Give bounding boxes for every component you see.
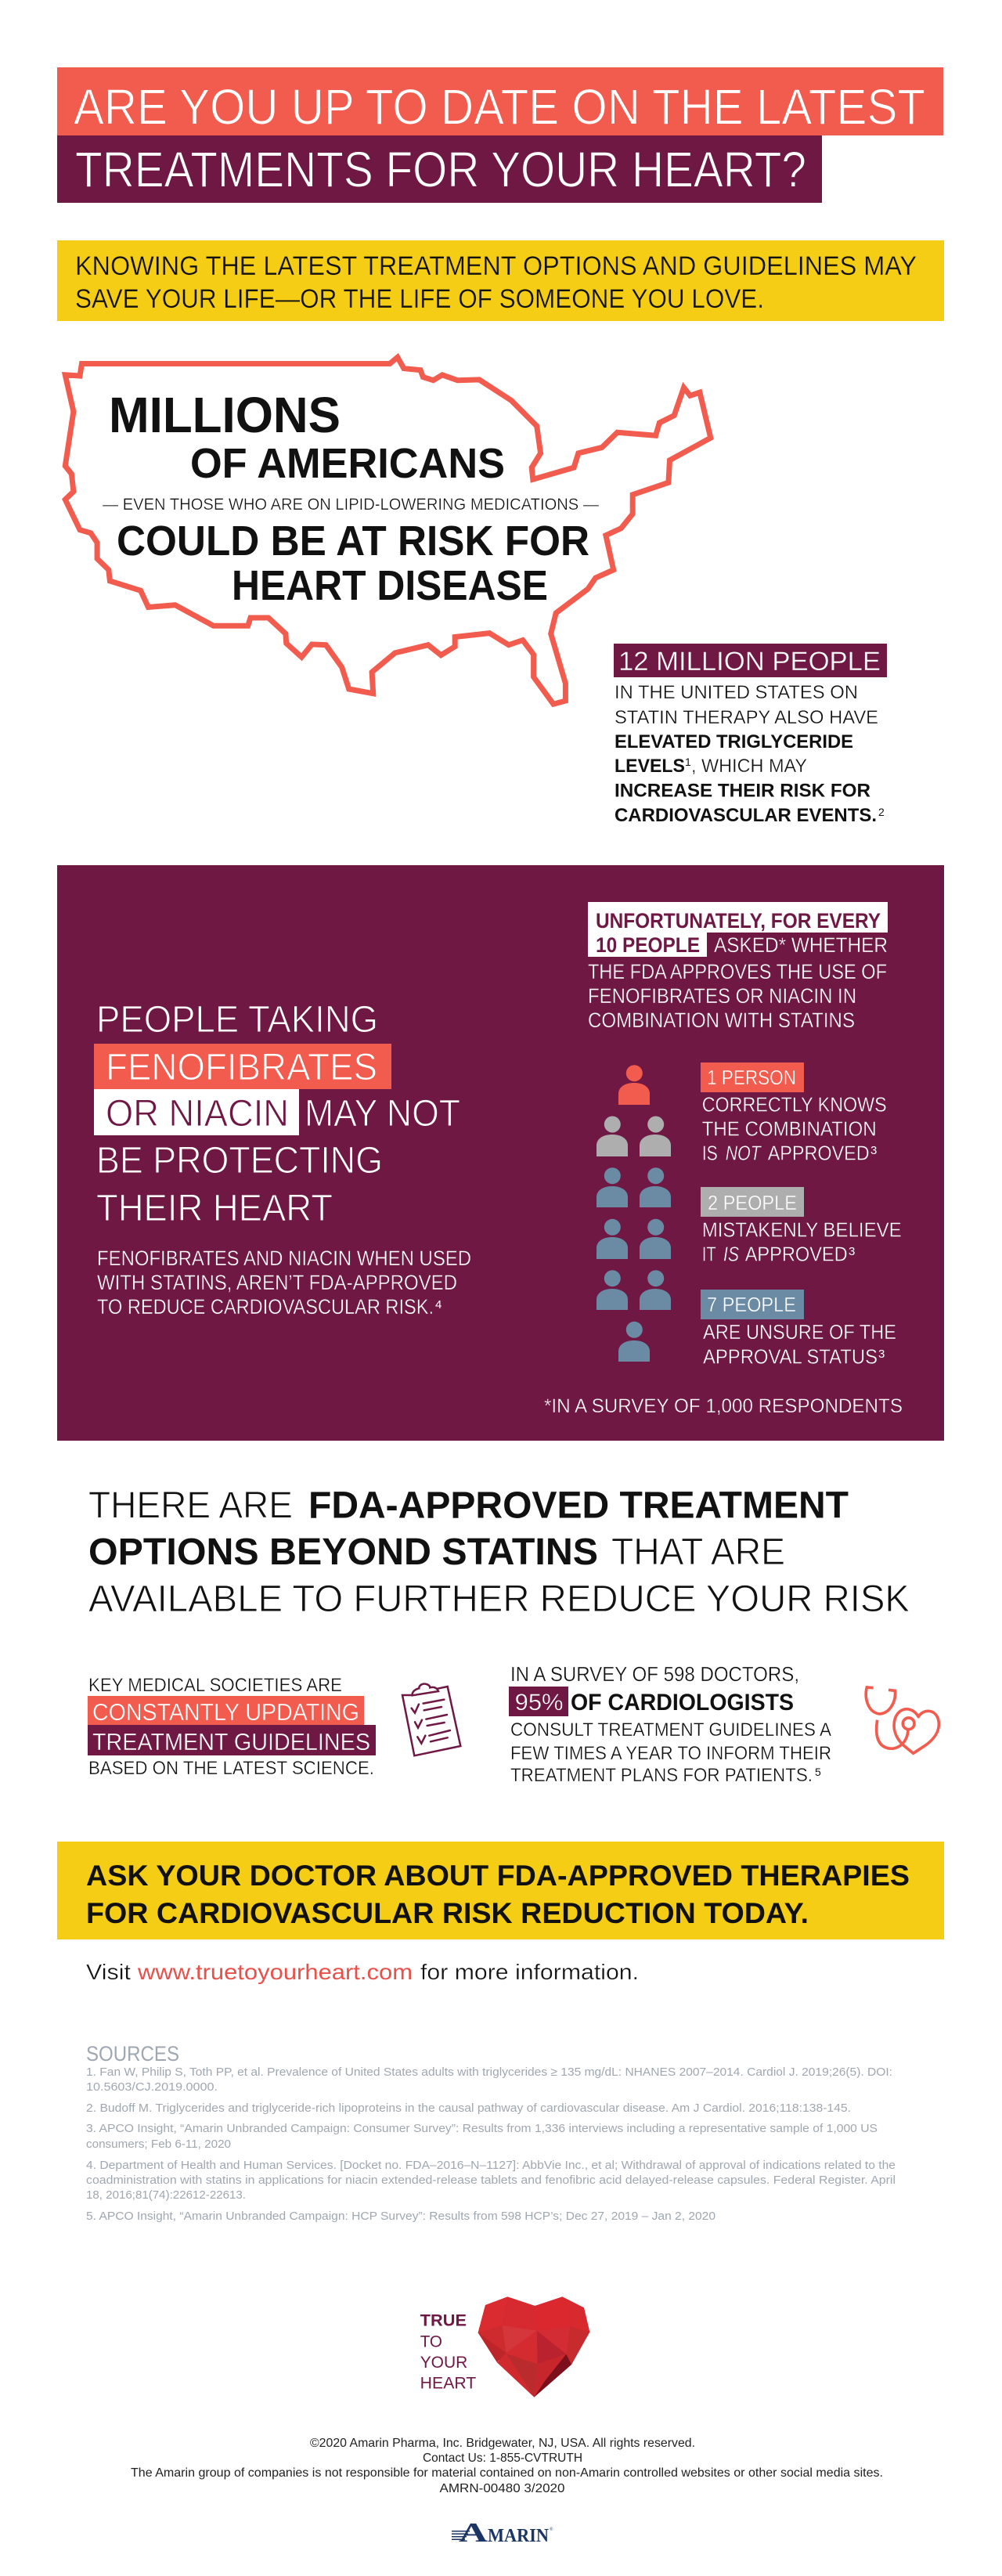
legend: 2 people: 3 — [849, 1245, 855, 1258]
title: ARE YOU UP TO DATE ON THE LATEST — [74, 79, 925, 135]
legend: 7 people: 3 — [878, 1348, 885, 1361]
callout: 12 million people: INCREASE THEIR RISK FOR — [615, 781, 870, 802]
legend: 1 person: IS — [702, 1143, 718, 1165]
panel body text: TO REDUCE CARDIOVASCULAR RISK. — [97, 1295, 434, 1319]
survey question: 10 PEOPLE — [596, 933, 700, 957]
legend: 1 person: CORRECTLY KNOWS — [702, 1094, 887, 1116]
panel body text: 4 — [435, 1298, 442, 1311]
callout: 12 million people: STATIN THERAPY ALSO HAVE — [615, 707, 878, 728]
survey question: THE FDA APPROVES THE USE OF — [588, 960, 887, 983]
website line — [86, 1960, 639, 1984]
map headline: COULD BE AT RISK FOR — [117, 518, 589, 565]
logo: Amarin: ® — [550, 2527, 553, 2532]
logo: Amarin: A — [459, 2517, 488, 2548]
website line: Visit — [86, 1960, 131, 1984]
survey question: COMBINATION WITH STATINS — [588, 1008, 855, 1032]
panel headline: OR NIACIN — [106, 1093, 289, 1135]
intro banner: KNOWING THE LATEST TREATMENT OPTIONS AND GUIDELINES MAY — [75, 251, 917, 281]
logo: Amarin: MARIN — [488, 2526, 550, 2546]
survey question: FENOFIBRATES OR NIACIN IN — [588, 984, 856, 1008]
pictogram: ten people — [597, 1065, 671, 1362]
logo wordmark — [420, 2311, 476, 2393]
sources: 5. APCO Insight, “Amarin Unbranded Campaign: HCP Survey”: Results from 598 HCP’s; Dec 27, 2019 – Jan 2, 2020 — [86, 2210, 715, 2223]
survey footnote: *IN A SURVEY OF 1,000 RESPONDENTS — [544, 1395, 903, 1417]
panel headline — [94, 999, 460, 1229]
callout: 12 million people: LEVELS — [615, 756, 685, 777]
icon: faceted heart — [478, 2296, 589, 2397]
legend: 7 people — [701, 1290, 896, 1369]
sources: coadministration with statins in applications for niacin extended-release tablets and fenofibric acid delayed-release capsules. Federal Register. April — [86, 2174, 896, 2187]
text block: medical societies — [88, 1675, 376, 1779]
panel body text: WITH STATINS, AREN’T FDA-APPROVED — [97, 1271, 457, 1294]
legend: 2 people: 2 PEOPLE — [708, 1192, 797, 1214]
panel: fenofibrates and niacin — [57, 865, 944, 1441]
intro banner: SAVE YOUR LIFE—OR THE LIFE OF SOMEONE YOU LOVE. — [75, 284, 764, 314]
sources: 4. Department of Health and Human Services. [Docket no. FDA–2016–N–1127]: AbbVie Inc., et al; Withdrawal of approval of indications related to the — [86, 2159, 896, 2172]
logo wordmark: TRUE — [420, 2311, 467, 2330]
legend: 1 person: NOT — [726, 1143, 762, 1165]
intro banner — [57, 240, 944, 321]
legal footer: AMRN-00480 3/2020 — [440, 2482, 565, 2495]
heading: FDA-approved options: OPTIONS BEYOND STATINS — [88, 1532, 598, 1573]
logo wordmark: HEART — [420, 2375, 476, 2393]
sources: 2. Budoff M. Triglycerides and triglyceride-rich lipoproteins in the causal pathway of cardiovascular disease. Am J Cardiol. 2016;118:138-145. — [86, 2102, 851, 2115]
map headline: OF AMERICANS — [190, 440, 505, 487]
heading: FDA-approved options: AVAILABLE TO FURTHER REDUCE YOUR RISK — [88, 1578, 910, 1620]
website line: for more information. — [420, 1960, 639, 1984]
legend: 1 person: 3 — [870, 1144, 877, 1157]
panel headline: THEIR HEART — [96, 1188, 333, 1229]
heading: FDA-approved options — [88, 1485, 910, 1620]
map headline — [103, 387, 599, 609]
sources: 10.5603/CJ.2019.0000. — [86, 2080, 218, 2094]
logo: Amarin — [452, 2517, 553, 2548]
callout: 12 million people: 1 — [685, 756, 691, 768]
text block: medical societies: KEY MEDICAL SOCIETIES ARE — [88, 1675, 342, 1696]
panel body text — [97, 1247, 471, 1319]
legend: 2 people: IS — [723, 1244, 739, 1266]
heading: FDA-approved options: THERE ARE — [88, 1485, 293, 1526]
sources: consumers; Feb 6-11, 2020 — [86, 2138, 231, 2151]
legend: 2 people: IT — [702, 1244, 716, 1266]
callout: 12 million people: IN THE UNITED STATES ON — [615, 682, 858, 703]
map of the United States — [65, 357, 711, 704]
legend: 1 person: 1 PERSON — [707, 1067, 796, 1089]
survey question — [588, 902, 888, 1032]
text block: survey of doctors: 95% — [515, 1690, 564, 1716]
survey question: UNFORTUNATELY, FOR EVERY — [596, 909, 881, 933]
legend: 1 person: APPROVED — [768, 1143, 870, 1165]
legal footer: ©2020 Amarin Pharma, Inc. Bridgewater, NJ, USA. All rights reserved. — [310, 2437, 695, 2450]
callout: 12 million people — [614, 644, 887, 826]
logo wordmark: YOUR — [420, 2354, 467, 2372]
legend: 1 person — [701, 1063, 887, 1165]
text block: survey of doctors: TREATMENT PLANS FOR PATIENTS. — [510, 1765, 813, 1786]
heading: FDA-approved options: THAT ARE — [611, 1532, 785, 1573]
callout: 12 million people: 2 — [878, 806, 885, 818]
callout: 12 million people: CARDIOVASCULAR EVENTS. — [615, 805, 877, 826]
panel headline: BE PROTECTING — [96, 1140, 383, 1182]
text block: survey of doctors: CONSULT TREATMENT GUIDELINES A — [510, 1719, 832, 1741]
text block: survey of doctors: IN A SURVEY OF 598 DOCTORS, — [510, 1662, 799, 1686]
text block: survey of doctors: OF CARDIOLOGISTS — [571, 1690, 794, 1716]
legend: 2 people: MISTAKENLY BELIEVE — [702, 1219, 902, 1241]
text block: medical societies: BASED ON THE LATEST SCIENCE. — [88, 1758, 374, 1779]
logo: True to Your Heart — [420, 2296, 589, 2397]
legend: 7 people: ARE UNSURE OF THE — [703, 1322, 896, 1344]
text block: survey of doctors: 5 — [815, 1766, 821, 1778]
callout: 12 million people: 12 MILLION PEOPLE — [618, 647, 881, 676]
legend: 7 people: 7 PEOPLE — [707, 1294, 796, 1316]
call to action banner — [57, 1842, 944, 1939]
callout: 12 million people: ELEVATED TRIGLYCERIDE — [615, 731, 853, 752]
text block: survey of doctors — [509, 1662, 832, 1786]
panel headline: FENOFIBRATES — [106, 1047, 377, 1088]
logo wordmark: TO — [420, 2332, 442, 2351]
panel headline: MAY NOT — [305, 1093, 460, 1135]
text block: medical societies: TREATMENT GUIDELINES — [92, 1729, 370, 1755]
title: TREATMENTS FOR YOUR HEART? — [75, 141, 806, 197]
legal footer: The Amarin group of companies is not responsible for material contained on non-Amarin controlled websites or other social media sites. — [131, 2466, 883, 2480]
legend: 1 person: THE COMBINATION — [702, 1119, 877, 1141]
icon: stethoscope and heart — [866, 1687, 939, 1753]
legend: 2 people — [701, 1187, 902, 1266]
sources: 18, 2016;81(74):22612-22613. — [86, 2188, 246, 2202]
panel body text: FENOFIBRATES AND NIACIN WHEN USED — [97, 1247, 471, 1270]
call to action banner: ASK YOUR DOCTOR ABOUT FDA-APPROVED THERAPIES — [86, 1860, 910, 1892]
sources: 3. APCO Insight, “Amarin Unbranded Campaign: Consumer Survey”: Results from 1,336 interviews including a representative sample of 1,000 US — [86, 2122, 878, 2135]
panel headline: PEOPLE TAKING — [96, 999, 378, 1041]
legal footer: Contact Us: 1-855-CVTRUTH — [423, 2452, 582, 2465]
icon: clipboard — [402, 1684, 460, 1755]
survey question: ASKED* WHETHER — [714, 933, 888, 957]
legal footer — [131, 2437, 883, 2495]
legend: 2 people: APPROVED — [745, 1244, 848, 1266]
callout: 12 million people: , WHICH MAY — [691, 756, 807, 777]
text block: survey of doctors: FEW TIMES A YEAR TO INFORM THEIR — [510, 1743, 831, 1764]
sources: 1. Fan W, Philip S, Toth PP, et al. Prevalence of United States adults with triglycerides ≥ 135 mg/dL: NHANES 2007–2014. Cardiol J. 2019;26(5). DOI: — [86, 2065, 892, 2079]
map headline: MILLIONS — [109, 387, 341, 443]
website line: www.truetoyourheart.com — [137, 1960, 413, 1984]
legend: 7 people: APPROVAL STATUS — [703, 1347, 878, 1369]
call to action banner: FOR CARDIOVASCULAR RISK REDUCTION TODAY. — [86, 1897, 809, 1929]
sources — [86, 2042, 896, 2223]
map headline: HEART DISEASE — [232, 562, 548, 609]
heading: FDA-approved options: FDA-APPROVED TREATMENT — [308, 1485, 849, 1526]
map headline: — EVEN THOSE WHO ARE ON LIPID-LOWERING MEDICATIONS — — [103, 496, 599, 514]
title — [57, 67, 943, 203]
sources: SOURCES — [86, 2042, 179, 2065]
text block: medical societies: CONSTANTLY UPDATING — [92, 1699, 359, 1726]
